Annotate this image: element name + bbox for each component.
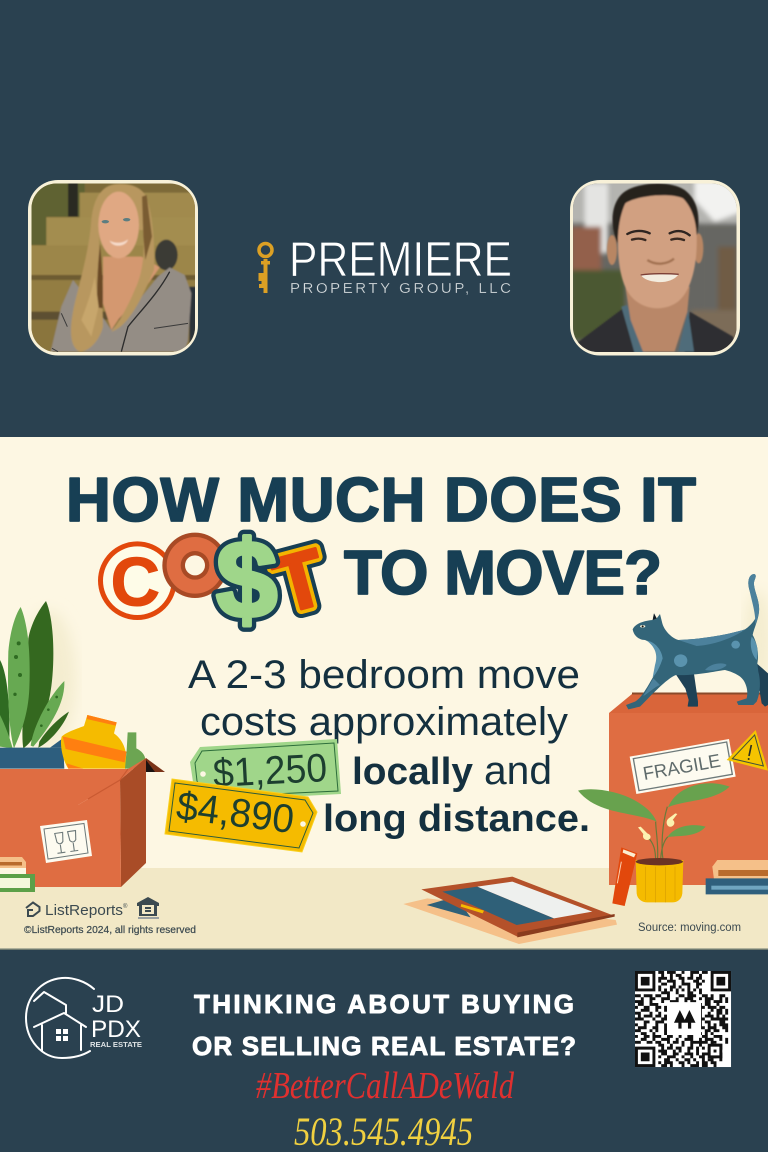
body text: A 2-3 bedroom move [188, 653, 580, 697]
QR center arrows [667, 1002, 701, 1035]
icon: houses in circle [26, 978, 94, 1058]
hashtag: #BetterCallADeWald [256, 1065, 515, 1107]
footer: ListReports brand: ©ListReports 2024, all rights reserved [24, 925, 196, 936]
brows and eyes [627, 231, 690, 235]
letter T: T [265, 532, 335, 630]
photo: woman agent [28, 180, 200, 358]
body text: long distance. [323, 798, 590, 840]
title [66, 466, 696, 608]
logo: Premiere Property Group: PREMIERE [289, 233, 512, 287]
price tag: $4,890 [165, 779, 317, 852]
body text: costs approximately [200, 700, 568, 744]
footer: ListReports brand: ® [123, 903, 128, 910]
illustration: plant, vase and bottle in open box [0, 601, 145, 769]
face [98, 192, 139, 258]
footer: ListReports brand: ListReports [45, 902, 123, 919]
title: TO MOVE? [344, 539, 662, 608]
body text: locally [352, 751, 473, 793]
jacket [571, 308, 738, 358]
icon: equal housing [137, 897, 159, 919]
box label: wine glasses [40, 820, 92, 863]
logo: Premiere Property Group [258, 233, 512, 297]
illustration: left open box [0, 758, 165, 892]
books on right [706, 860, 768, 894]
logo: JD PDX Real Estate: PDX [91, 1016, 141, 1043]
dollar sign: $ [216, 519, 277, 642]
shirt collar [621, 305, 694, 353]
illustration: potted flower and red book [578, 783, 730, 906]
illustration: picture frames on floor [403, 877, 617, 944]
icon: gold key [258, 244, 272, 293]
logo: JD PDX Real Estate: JD [92, 991, 124, 1018]
decorated word COST [98, 519, 335, 642]
warning triangle [727, 730, 768, 771]
plant in pot [0, 601, 69, 769]
letter O [162, 533, 228, 598]
pot [636, 860, 683, 902]
price tag: $1,250 [190, 739, 341, 801]
icon: ListReports house [26, 902, 40, 916]
title: HOW MUCH DOES IT [66, 466, 696, 535]
call to action heading [192, 989, 576, 1061]
logo: Premiere Property Group: PROPERTY GROUP, LLC [290, 280, 511, 297]
logo: JD PDX Real Estate: REAL ESTATE [90, 1042, 142, 1049]
books on left [0, 857, 35, 892]
neck [625, 287, 690, 352]
bottle [125, 732, 145, 769]
mouth [641, 274, 679, 282]
photo: man agent [568, 180, 742, 358]
vase [61, 715, 127, 769]
source note: Source: moving.com [638, 922, 741, 934]
price tag: $4,890: $4,890 [174, 784, 296, 842]
panel: cost to move card [0, 437, 768, 950]
letter C [98, 541, 177, 620]
ears [607, 235, 617, 265]
hair [613, 183, 698, 243]
body text: and [484, 749, 552, 793]
logo: JD PDX Real Estate [26, 978, 142, 1058]
leaves [578, 789, 657, 822]
flowers [638, 827, 651, 840]
nose shade [647, 259, 674, 264]
letter T: T [265, 532, 335, 630]
cardigan [51, 267, 191, 352]
call to action heading: THINKING ABOUT BUYING [194, 989, 574, 1019]
letter T: T [265, 532, 335, 630]
illustration: right box with cat [609, 574, 768, 894]
QR code [635, 971, 731, 1067]
stems [647, 807, 668, 862]
price tag: $1,250: $1,250 [212, 746, 328, 796]
head [618, 195, 697, 308]
body text [188, 653, 590, 840]
footer: ListReports brand [24, 897, 196, 936]
fragile sticker [630, 730, 768, 794]
dollar sign: $ [216, 519, 277, 642]
chest [103, 257, 160, 330]
cat [626, 574, 768, 709]
letter C: C [111, 544, 160, 620]
hair [71, 184, 154, 352]
fragile sticker: FRAGILE [641, 750, 722, 784]
call to action heading: OR SELLING REAL ESTATE? [192, 1031, 576, 1061]
red book [612, 847, 637, 906]
